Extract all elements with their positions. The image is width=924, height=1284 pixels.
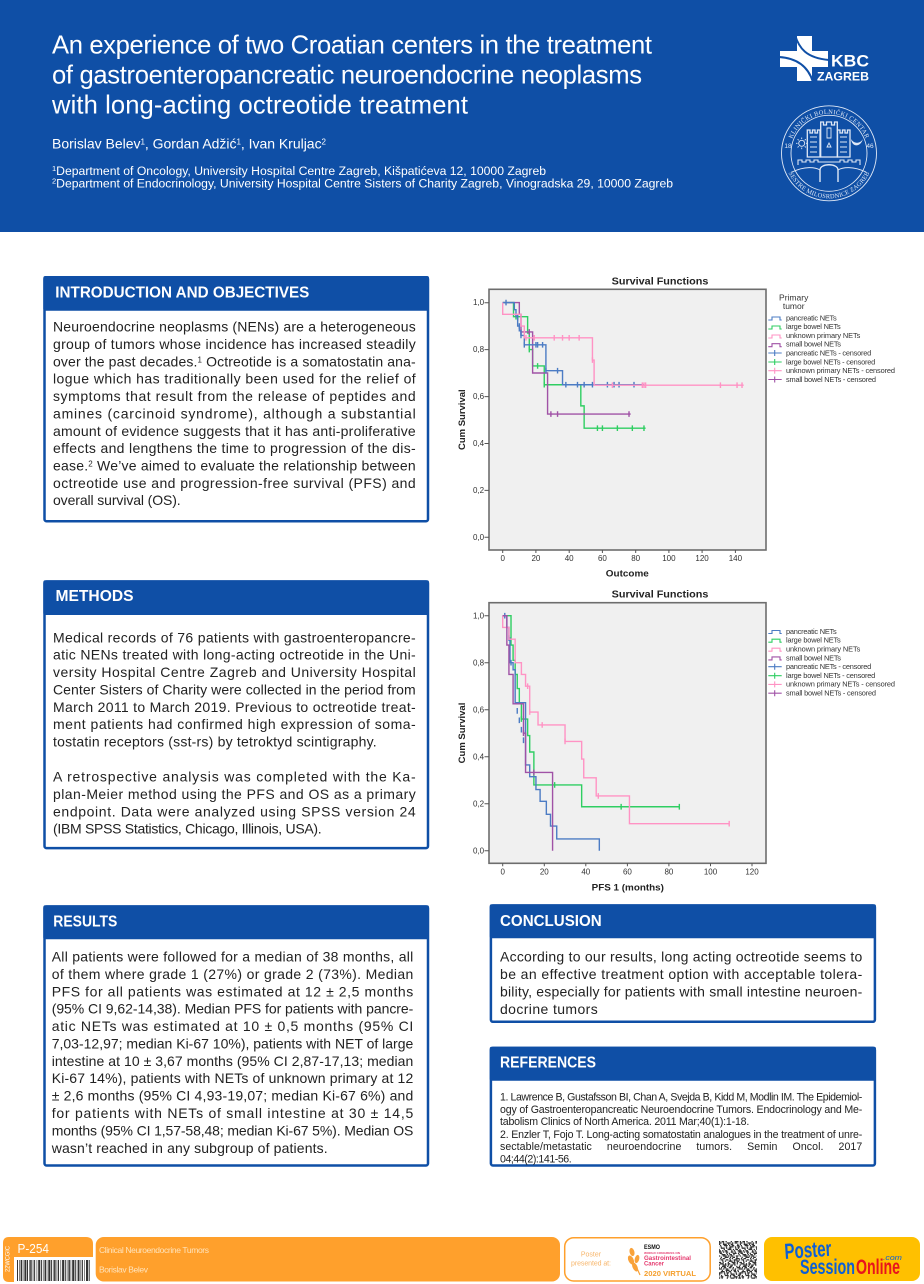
legend: small bowel NETs (786, 653, 841, 662)
text block: results: (95% CI 9,62-14,38). Median PFS for patients with pancre- (52, 1001, 414, 1017)
text block: introduction (53, 319, 416, 508)
icon: barcode (17, 1260, 90, 1281)
axis labels: 60 (598, 554, 607, 563)
heading: introduction and objectives: INTRODUCTION AND OBJECTIVES (55, 284, 309, 302)
footer: poster presented at congress: presented at: (571, 1261, 611, 1268)
text block: conclusion: According to our results, long acting octreotide seems to (500, 949, 863, 965)
axis labels: 140 (729, 554, 743, 563)
legend: pancreatic NETs - censored (786, 348, 871, 357)
axis labels: 0,0 (473, 533, 485, 542)
text block: introduction: ease. (53, 458, 88, 474)
text block: methods: tostatin receptors (sst-rs) by tetroktyd scintigraphy. (53, 734, 377, 750)
legend: large bowel NETs (786, 322, 841, 331)
text block: conclusion: docrine tumors (500, 1001, 598, 1017)
legend: small bowel NETs - censored (786, 689, 876, 698)
text block: introduction: effects and lengthens the time to progression of the dis- (53, 440, 416, 456)
legend: pancreatic NETs (786, 313, 837, 322)
legend: large bowel NETs - censored (786, 671, 875, 680)
icon: Sestre Milosrdnice seal: 46 (866, 143, 874, 150)
survival curves (503, 613, 729, 851)
legend: unknown primary NETs - censored (786, 680, 895, 689)
icon: Sestre Milosrdnice seal: KLINIČKI BOLNIČKI CENTAR (788, 109, 869, 139)
text block: methods: endpoint. Data were analyzed using SPSS version 24 (53, 803, 416, 819)
legend: large bowel NETs (786, 636, 841, 645)
axis labels: 120 (745, 867, 759, 876)
axis labels: 0,8 (473, 658, 485, 667)
chart: overall survival by primary tumor: Cum Survival (457, 389, 468, 450)
chart title: Survival Functions (612, 590, 709, 601)
text block: results: Ki-67 14%), patients with NETs of unknown primary at 12 (52, 1070, 414, 1086)
text block: introduction: logue which has traditionally been used for the relief of (53, 371, 416, 387)
text block: methods: ment patients had confirmed high expression of soma- (53, 716, 416, 732)
footer: poster number and barcode: P-254 (18, 1241, 49, 1256)
authors: 1 (236, 137, 241, 146)
text block: results: months (95% CI 1,57-58,48; median Ki-67 5%). Median OS (52, 1122, 413, 1138)
text block: results: 7,03-12,97; median Ki-67 10%), patients with NET of large (52, 1035, 414, 1051)
footer: PosterSessionOnline logo: Poster (784, 1236, 833, 1264)
text block: results: of them where grade 1 (27%) or grade 2 (73%). Median (52, 966, 413, 982)
text block: introduction: overall survival (OS). (53, 492, 181, 508)
footer: PosterSessionOnline logo (764, 1236, 920, 1281)
authors: 2 (322, 137, 327, 146)
axis labels: 1,0 (473, 611, 485, 620)
legend: unknown primary NETs (786, 645, 861, 654)
icon: Sestre Milosrdnice seal: 18 (784, 143, 792, 150)
heading: references: REFERENCES (500, 1055, 596, 1072)
legend: Primary (779, 293, 809, 303)
text block: introduction: 1 (197, 355, 202, 364)
axis labels: 1,0 (473, 298, 485, 307)
axis labels: 0,6 (473, 392, 485, 401)
footer: session and presenter bar: Borislav Belev (99, 1265, 149, 1275)
text block: introduction: amount of evidence suggests that it has anti-proliferative (53, 423, 416, 439)
text block: methods: (IBM SPSS Statistics, Chicago, Illinois, USA). (53, 821, 322, 837)
text block: references: 2. Enzler T, Fojo T. Long-acting somatostatin analogues in the treatment of unre- (500, 1129, 863, 1141)
footer: poster number and barcode (3, 1237, 93, 1282)
legend: small bowel NETs (786, 340, 841, 349)
heading: results: RESULTS (53, 914, 117, 931)
icon: Sestre Milosrdnice seal (781, 105, 877, 202)
text block: results: wasn’t reached in any subgroup of patients. (51, 1140, 328, 1156)
text block: introduction: Octreotide is a somatostatin ana- (202, 353, 416, 369)
footer: poster presented at congress: Poster (581, 1252, 602, 1259)
text block: results: ± 2,6 months (95% CI 4,93-19,07; median Ki-67 6%) and (52, 1088, 413, 1104)
text block: methods (53, 629, 416, 837)
title (51, 32, 652, 120)
axis labels: 20 (531, 554, 541, 563)
heading: conclusion: CONCLUSION (500, 913, 602, 930)
legend: unknown primary NETs (786, 331, 861, 340)
axis labels (473, 611, 759, 876)
text block: methods: versity Hospital Centre Zagreb and University Hospital (53, 664, 416, 680)
text block: methods: atic NENs treated with long-acting octreotide in the Uni- (53, 647, 416, 663)
text block: references: 1. Lawrence B, Gustafsson BI, Chan A, Svejda B, Kidd M, Modlin IM. The Epidemiol- (500, 1092, 863, 1104)
legend: pancreatic NETs - censored (786, 662, 871, 671)
authors: 1 (140, 137, 145, 146)
chart: overall survival by primary tumor (457, 276, 895, 579)
chart: progression-free survival by primary tumor: PFS 1 (months) (592, 882, 664, 892)
axis labels: 40 (565, 554, 574, 563)
text block: results: for patients with NETs of small intestine at 30 ± 14,5 (52, 1105, 414, 1121)
survival curves (503, 300, 744, 431)
panel: methods (43, 580, 429, 848)
icon: QR code (719, 1242, 757, 1278)
footer: session and presenter bar: Clinical Neuroendocrine Tumors (99, 1245, 209, 1255)
header banner (0, 0, 924, 232)
text block: references: tabolism Clinics of North America. 2011 Mar;40(1):1-18. (500, 1116, 749, 1128)
axis labels: 40 (581, 867, 591, 876)
text block: results (51, 949, 414, 1156)
authors: , Gordan Adžić (145, 135, 236, 151)
icon: KBC Zagreb logo (779, 35, 869, 84)
footer: poster presented at congress: 2020 VIRTUAL (644, 1269, 697, 1278)
text block: introduction: Neuroendocrine neoplasms (NENs) are a heterogeneous (53, 319, 416, 335)
text block: introduction: symptoms that result from the release of peptides and (53, 388, 416, 404)
axis labels: 100 (704, 867, 718, 876)
affiliations: 1 (52, 164, 56, 173)
legend: small bowel NETs - censored (786, 375, 876, 384)
heading: methods: METHODS (56, 588, 134, 605)
legend: unknown primary NETs - censored (786, 366, 895, 375)
footer: poster presented at congress: ESMO (644, 1244, 660, 1251)
panel: conclusion (490, 904, 876, 1022)
text block: results: All patients were followed for a median of 38 months, all (52, 949, 413, 965)
text block: results: atic NETs was estimated at 10 ± 0,5 months (95% CI (52, 1018, 413, 1034)
panel: results (43, 905, 429, 1166)
legend (768, 293, 895, 384)
axis labels: 80 (631, 554, 641, 563)
legend: pancreatic NETs (786, 627, 837, 636)
legend: large bowel NETs - censored (786, 357, 875, 366)
footer: poster number and barcode: 22WCGIC (4, 1246, 12, 1272)
footer: poster presented at congress: Cancer (644, 1261, 665, 1268)
affiliations: Department of Endocrinology, University Hospital Centre Sisters of Charity Zagreb, Vinogradska 29, 10000 Zagreb (56, 177, 673, 191)
text block: results: PFS for all patients was estimated at 12 ± 2,5 months (52, 983, 413, 999)
axis labels: 120 (695, 554, 709, 563)
icon: KBC Zagreb logo: KBC (831, 52, 869, 71)
text block: references: 04;44(2):141-56. (500, 1153, 572, 1165)
footer: PosterSessionOnline logo: Session (800, 1256, 855, 1279)
axis labels: 0,4 (473, 752, 485, 761)
text block: introduction: amines (carcinoid syndrome), although a substantial (53, 405, 416, 421)
text block: introduction: octreotide use and progression-free survival (PFS) and (53, 475, 416, 491)
title: with long-acting octreotide treatment (51, 92, 468, 120)
text block: methods: Center Sisters of Charity were collected in the period from (53, 681, 416, 697)
icon: Sestre Milosrdnice seal: SESTRE MILOSRDNICE ZAGREB (788, 172, 869, 198)
chart: progression-free survival by primary tumor (457, 590, 895, 892)
axis labels: 100 (662, 554, 676, 563)
footer: PosterSessionOnline logo: .com (883, 1253, 902, 1262)
axis labels: 20 (540, 867, 549, 876)
text block: methods: A retrospective analysis was completed with the Ka- (53, 768, 416, 784)
axis labels: 0,6 (473, 705, 485, 714)
text block: introduction: over the past decades. (53, 353, 197, 369)
footer: PosterSessionOnline logo: Online (856, 1256, 900, 1279)
affiliations: 2 (52, 177, 56, 186)
text block: introduction: group of tumors whose incidence has increased steadily (53, 336, 416, 352)
axis labels: 0,8 (473, 345, 485, 354)
axis labels: 0,2 (473, 486, 485, 495)
axis labels: 60 (623, 867, 632, 876)
footer: session and presenter bar (96, 1237, 560, 1282)
footer: poster presented at congress: WORLD CONGRESS ON (644, 1251, 680, 1255)
affiliations (52, 164, 673, 191)
text block: conclusion (500, 949, 863, 1017)
text block: methods: Medical records of 76 patients with gastroenteropancre- (53, 629, 416, 645)
panel: references (490, 1047, 876, 1166)
panel: introduction and objectives (43, 276, 429, 521)
text block: references: sectable/metastatic neuroendocrine tumors. Semin Oncol. 2017 (500, 1141, 862, 1153)
axis labels: 0,4 (473, 439, 485, 448)
chart: overall survival by primary tumor: Outcome (606, 569, 649, 579)
axis labels: 0,0 (473, 846, 485, 855)
legend: tumor (783, 301, 805, 311)
authors: , Ivan Kruljac (241, 135, 322, 151)
legend (768, 627, 895, 698)
text block: introduction: 2 (88, 460, 93, 468)
axis labels (473, 298, 743, 563)
axis labels: 80 (664, 867, 674, 876)
authors: Borislav Belev (52, 135, 140, 151)
footer: poster presented at congress: Gastrointestinal (644, 1255, 691, 1262)
title: of gastroenteropancreatic neuroendocrine neoplasms (52, 62, 642, 90)
text block: methods: plan-Meier method using the PFS and OS as a primary (53, 786, 416, 802)
title: An experience of two Croatian centers in the treatment (52, 32, 652, 60)
text block: conclusion: bility, especially for patients with small intestine neuroen- (500, 984, 863, 1000)
affiliations: Department of Oncology, University Hospital Centre Zagreb, Kišpatićeva 12, 10000 Zagreb (56, 164, 546, 178)
icon: KBC Zagreb logo: ZAGREB (817, 70, 869, 84)
axis labels: 0 (500, 867, 505, 876)
text block: references (500, 1092, 863, 1165)
text block: methods: March 2011 to March 2019. Previous to octreotide treat- (53, 699, 416, 715)
axis labels: 0,2 (473, 799, 485, 808)
chart: progression-free survival by primary tumor: Cum Survival (457, 703, 468, 763)
icon: wheat (627, 1247, 640, 1275)
axis labels: 0 (500, 554, 505, 563)
text block: conclusion: be an effective treatment option with acceptable tolera- (500, 966, 863, 982)
text block: introduction: We’ve aimed to evaluate the relationship between (93, 458, 416, 474)
chart title: Survival Functions (612, 276, 709, 287)
text block: references: ogy of Gastroenteropancreatic Neuroendocrine Tumors. Endocrinology and Me- (500, 1104, 863, 1116)
text block: results: intestine at 10 ± 3,67 months (95% CI 2,87-17,13; median (52, 1053, 413, 1069)
footer: poster presented at congress (565, 1238, 710, 1281)
